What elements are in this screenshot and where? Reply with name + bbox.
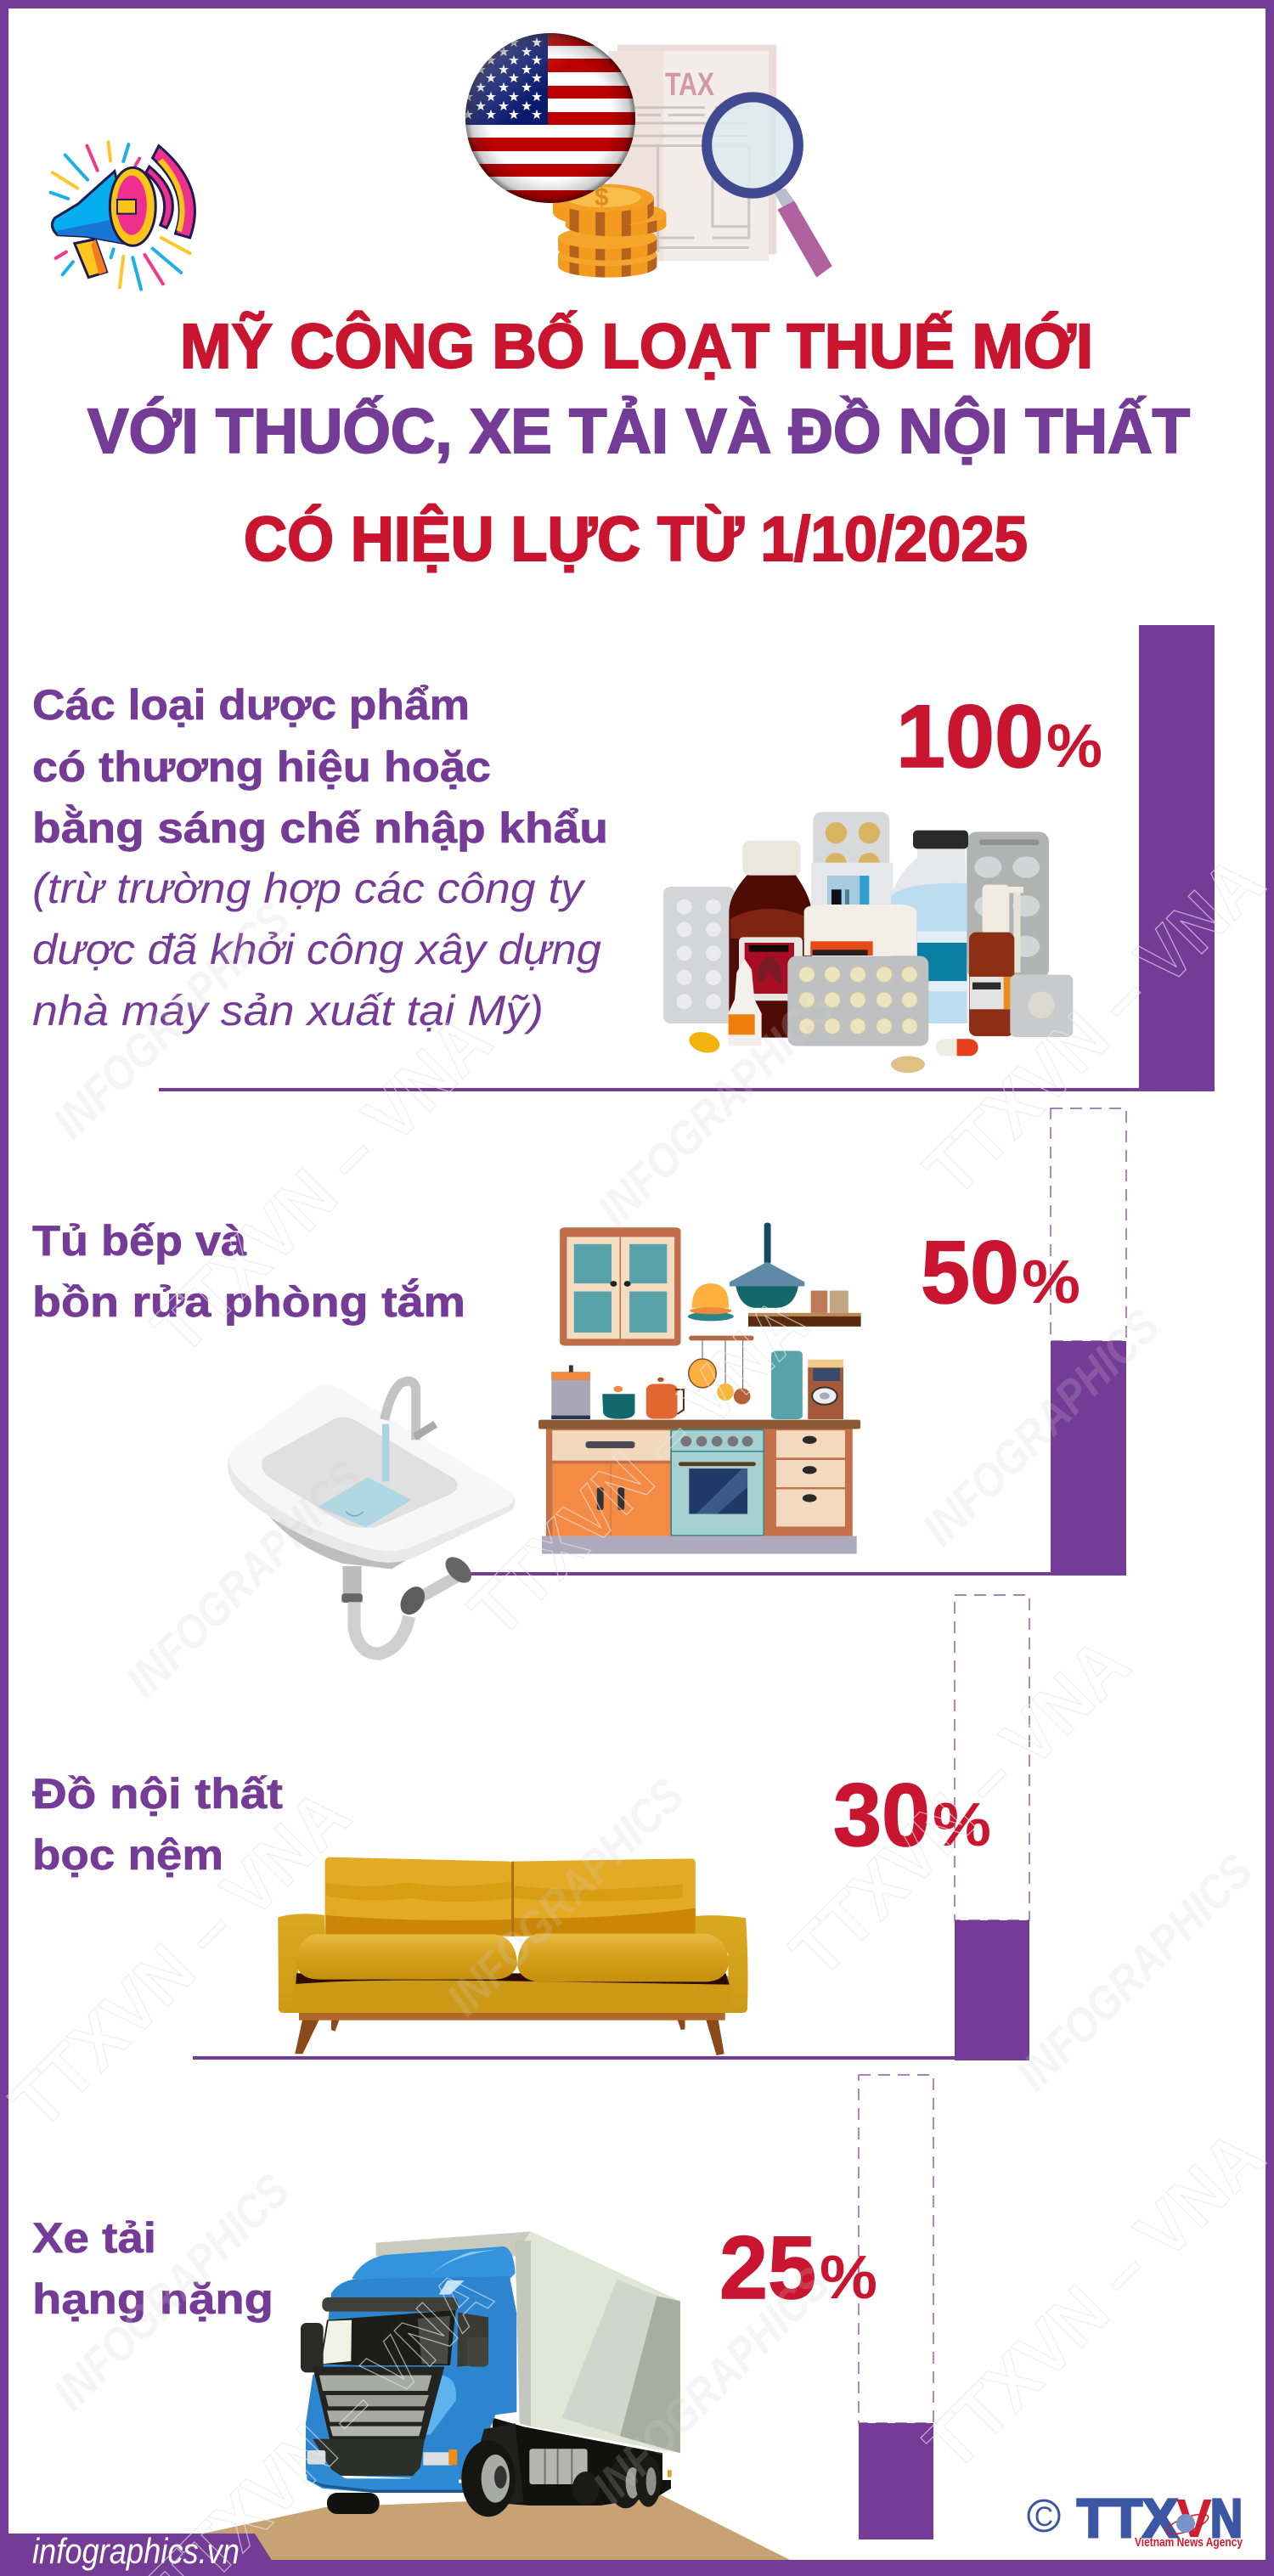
watermarks: INFOGRAPHICS xyxy=(42,2163,300,2421)
value 30%: % xyxy=(933,1791,991,1859)
value 25%: 25 xyxy=(719,2218,816,2318)
title line 2: VỚI THUỐC, XE TẢI VÀ ĐỒ NỘI THẤT xyxy=(87,396,1190,466)
value 25%: % xyxy=(820,2244,877,2312)
baseline xyxy=(159,1088,1139,1091)
value 100%: % xyxy=(1046,713,1102,781)
bar 30% xyxy=(955,1595,1029,2060)
website tag: infographics.vn xyxy=(32,2531,240,2571)
pharmaceuticals label: bằng sáng chế nhập khẩu xyxy=(32,804,608,852)
value 25% xyxy=(719,2218,877,2318)
bar 100% xyxy=(1139,625,1215,1091)
trucks label: hạng nặng xyxy=(32,2275,273,2323)
pharmaceuticals label: dược đã khởi công xây dựng xyxy=(32,926,601,973)
value 30% xyxy=(833,1766,991,1865)
bar 25% xyxy=(859,2075,933,2539)
TTXVN logo: C xyxy=(1034,2501,1053,2532)
panel: pharmaceuticals xyxy=(32,625,1215,1091)
panel: upholstered furniture xyxy=(32,1595,1029,2060)
watermarks: TTXVN – VNA xyxy=(138,1000,507,1369)
baseline xyxy=(470,1572,1051,1575)
pharmaceuticals label xyxy=(32,681,608,1034)
tax label: TAX xyxy=(665,67,715,103)
trucks label xyxy=(32,2214,273,2323)
pharmaceuticals label: nhà máy sản xuất tại Mỹ) xyxy=(32,987,544,1034)
watermarks: INFOGRAPHICS xyxy=(587,979,844,1237)
pharmaceuticals label: Các loại dược phẩm xyxy=(32,681,470,729)
watermarks: INFOGRAPHICS xyxy=(912,1299,1170,1556)
value 50% xyxy=(921,1223,1080,1322)
icon: megaphone xyxy=(51,142,194,290)
kitchen label: Tủ bếp và xyxy=(32,1217,246,1265)
TTXVN logo: V xyxy=(1176,2488,1212,2549)
title line 1: MỸ CÔNG BỐ LOẠT THUẾ MỚI xyxy=(180,311,1093,381)
TTXVN logo: Vietnam News Agency xyxy=(1135,2535,1243,2550)
icon: truck xyxy=(301,2231,680,2517)
pharmaceuticals label: (trừ trường hợp các công ty xyxy=(32,865,586,912)
icon: USA flag sphere xyxy=(464,33,635,203)
icon: coins xyxy=(553,183,666,278)
icon: medicines xyxy=(663,812,1073,1073)
effective date: CÓ HIỆU LỰC TỪ 1/10/2025 xyxy=(244,504,1028,574)
furniture label: Đồ nội thất xyxy=(32,1770,283,1818)
watermarks: INFOGRAPHICS xyxy=(116,1451,373,1708)
bar 50% xyxy=(1051,1108,1126,1575)
pharmaceuticals label: có thương hiệu hoặc xyxy=(32,743,491,791)
panel: kitchen cabinets and bathroom sinks xyxy=(32,1108,1126,1654)
TTXVN logo: TTX xyxy=(1077,2488,1178,2549)
icon: sofa xyxy=(278,1857,748,2055)
icon: sink xyxy=(228,1381,515,1654)
kitchen label xyxy=(32,1217,465,1326)
ground xyxy=(203,2494,790,2560)
value 50%: 50 xyxy=(921,1223,1019,1322)
watermarks: INFOGRAPHICS xyxy=(42,892,300,1149)
watermarks xyxy=(0,842,1274,2576)
icon: coins: $ xyxy=(595,183,609,211)
trucks label: Xe tải xyxy=(32,2214,156,2262)
furniture label: bọc nệm xyxy=(32,1831,223,1879)
watermarks: TTXVN – VNA xyxy=(454,1282,824,1652)
value 100%: 100 xyxy=(896,687,1044,786)
icon: magnifier xyxy=(707,97,832,278)
value 30%: 30 xyxy=(833,1766,930,1865)
watermarks: TTXVN – VNA xyxy=(0,1774,365,2144)
kitchen label: bồn rửa phòng tắm xyxy=(32,1278,465,1326)
panel: heavy trucks xyxy=(32,2075,933,2560)
watermarks: TTXVN – VNA xyxy=(775,1623,1145,1993)
watermarks: INFOGRAPHICS xyxy=(437,1768,694,2026)
baseline xyxy=(193,2056,955,2060)
watermarks: INFOGRAPHICS xyxy=(583,2257,840,2514)
furniture label xyxy=(32,1770,283,1879)
icon: tax document xyxy=(608,45,776,262)
TTXVN logo: N xyxy=(1210,2488,1243,2549)
value 50%: % xyxy=(1022,1249,1080,1316)
TTXVN logo xyxy=(1029,2488,1243,2550)
icon: kitchen xyxy=(538,1222,861,1554)
